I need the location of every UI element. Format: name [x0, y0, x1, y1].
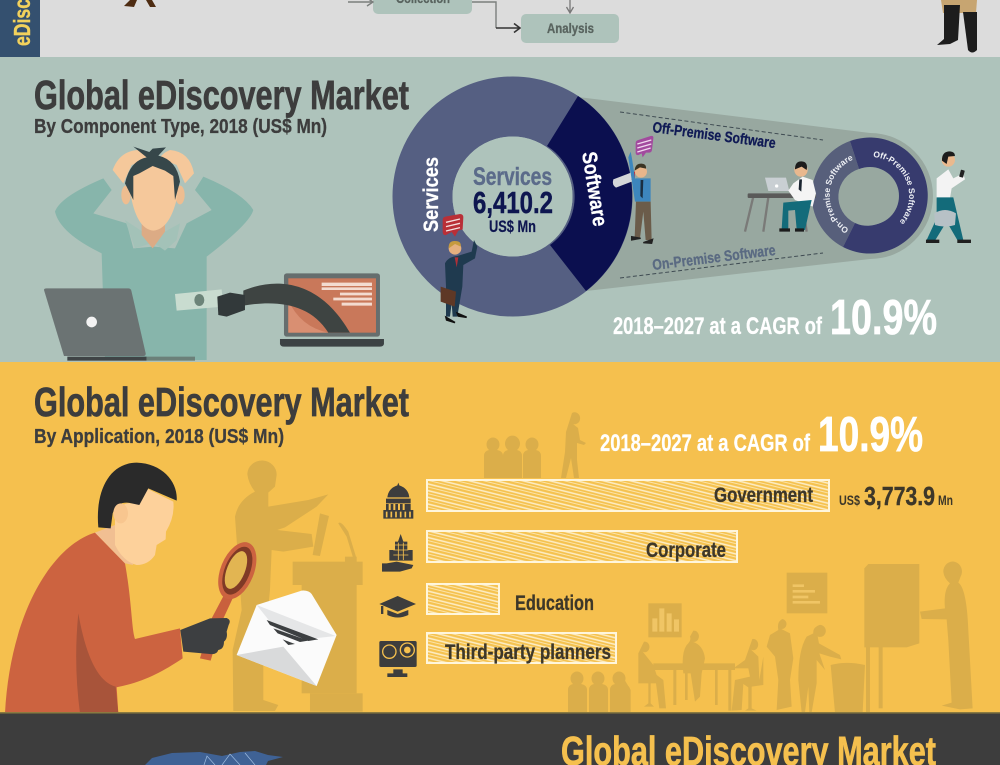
illustration: stressed man	[44, 147, 384, 361]
center value: Services	[473, 163, 552, 191]
center value	[473, 163, 553, 236]
woman at bin	[798, 625, 841, 712]
icon: arm stealing money	[175, 284, 350, 333]
center value: US$ Mn	[489, 217, 536, 236]
bar: corporate: Corporate	[646, 539, 726, 562]
panel: by application	[0, 362, 1000, 713]
heading: Global eDiscovery Market	[34, 379, 409, 425]
background silhouettes: audience top	[484, 412, 586, 478]
icon: hand holding building	[382, 534, 413, 572]
icon: cropped figure feet	[124, 0, 156, 7]
icons: application types	[379, 483, 417, 677]
bar: corporate	[427, 531, 737, 562]
process step: analysis	[521, 14, 619, 43]
value: government: 3,773.9	[864, 481, 935, 511]
icon: standing figure legs	[937, 0, 977, 52]
label: off-premise software: Off-Premise Software	[651, 119, 777, 152]
bar: education: Education	[515, 592, 594, 615]
icon: hacker laptop	[280, 273, 384, 347]
figure: businessman with speech bubble	[441, 214, 477, 323]
side tab	[0, 0, 40, 57]
icon: magnifier	[200, 537, 264, 661]
bar: education	[427, 584, 594, 615]
funnel: software breakout	[578, 97, 933, 291]
chart: main donut	[420, 96, 632, 291]
heading: Global eDiscovery Market	[34, 72, 409, 118]
figure: man at desk	[745, 161, 816, 232]
arrow: into collection	[348, 0, 496, 28]
cagr callout	[613, 291, 937, 345]
subheading: By Application, 2018 (US$ Mn)	[34, 426, 284, 448]
background silhouettes: meeting room	[620, 562, 973, 712]
value: government: US$	[839, 492, 860, 508]
bar: third-party planners: Third-party planners	[445, 641, 611, 664]
donut label: software: Software	[577, 150, 612, 228]
cagr callout: 10.9%	[818, 408, 923, 462]
cagr callout: 2018–2027 at a CAGR of	[613, 313, 823, 340]
donut label: on-premise: On-Premise Software	[824, 156, 852, 233]
icon: closed laptop	[44, 288, 195, 361]
subheading: By Component Type, 2018 (US$ Mn)	[34, 116, 327, 138]
panel: bottom regional section	[0, 712, 1000, 765]
icon: envelope	[237, 591, 337, 686]
cagr callout	[600, 408, 923, 462]
cagr callout: 10.9%	[830, 291, 937, 345]
icon: monitor with magnifier	[379, 641, 417, 677]
flip chart	[864, 564, 919, 712]
illustration: world map mesh	[145, 751, 283, 765]
icon: glove	[180, 618, 230, 654]
bar: government: Government	[714, 484, 813, 507]
center value: 6,410.2	[473, 185, 553, 220]
bar: third-party planners	[427, 633, 616, 664]
label: on-premise software: On-Premise Software	[651, 242, 777, 274]
process step: analysis: Analysis	[547, 20, 594, 36]
figure: walking man	[926, 151, 971, 243]
arrow: into analysis	[496, 24, 520, 32]
process step: collection	[373, 0, 472, 14]
bar: government	[427, 480, 829, 511]
chart: software split donut	[812, 138, 928, 254]
seated group at table	[620, 631, 763, 712]
donut label: off-premise: Off-Premise Software	[874, 152, 915, 224]
icon: graduation cap	[379, 596, 416, 617]
poster: list	[787, 573, 827, 613]
background silhouettes: audience bottom	[568, 671, 630, 713]
panel: by component type	[0, 57, 1000, 362]
panel: top process strip	[0, 0, 1000, 57]
arrow: down to analysis	[566, 0, 574, 13]
bin	[831, 663, 865, 712]
bar chart: applications	[427, 480, 953, 664]
presenter	[920, 562, 973, 709]
illustration: man with magnifier and envelope	[5, 463, 337, 713]
donut label: services: Services	[420, 157, 443, 232]
icon: capitol building	[383, 483, 413, 519]
cagr callout: 2018–2027 at a CAGR of	[600, 430, 811, 457]
poster: bar chart	[648, 603, 682, 637]
standing man	[767, 619, 793, 710]
figure: man with megaphone	[613, 136, 653, 243]
dashed guide lines	[620, 112, 823, 278]
background silhouette: speaker at podium	[233, 460, 363, 712]
value: government: Mn	[938, 492, 953, 508]
